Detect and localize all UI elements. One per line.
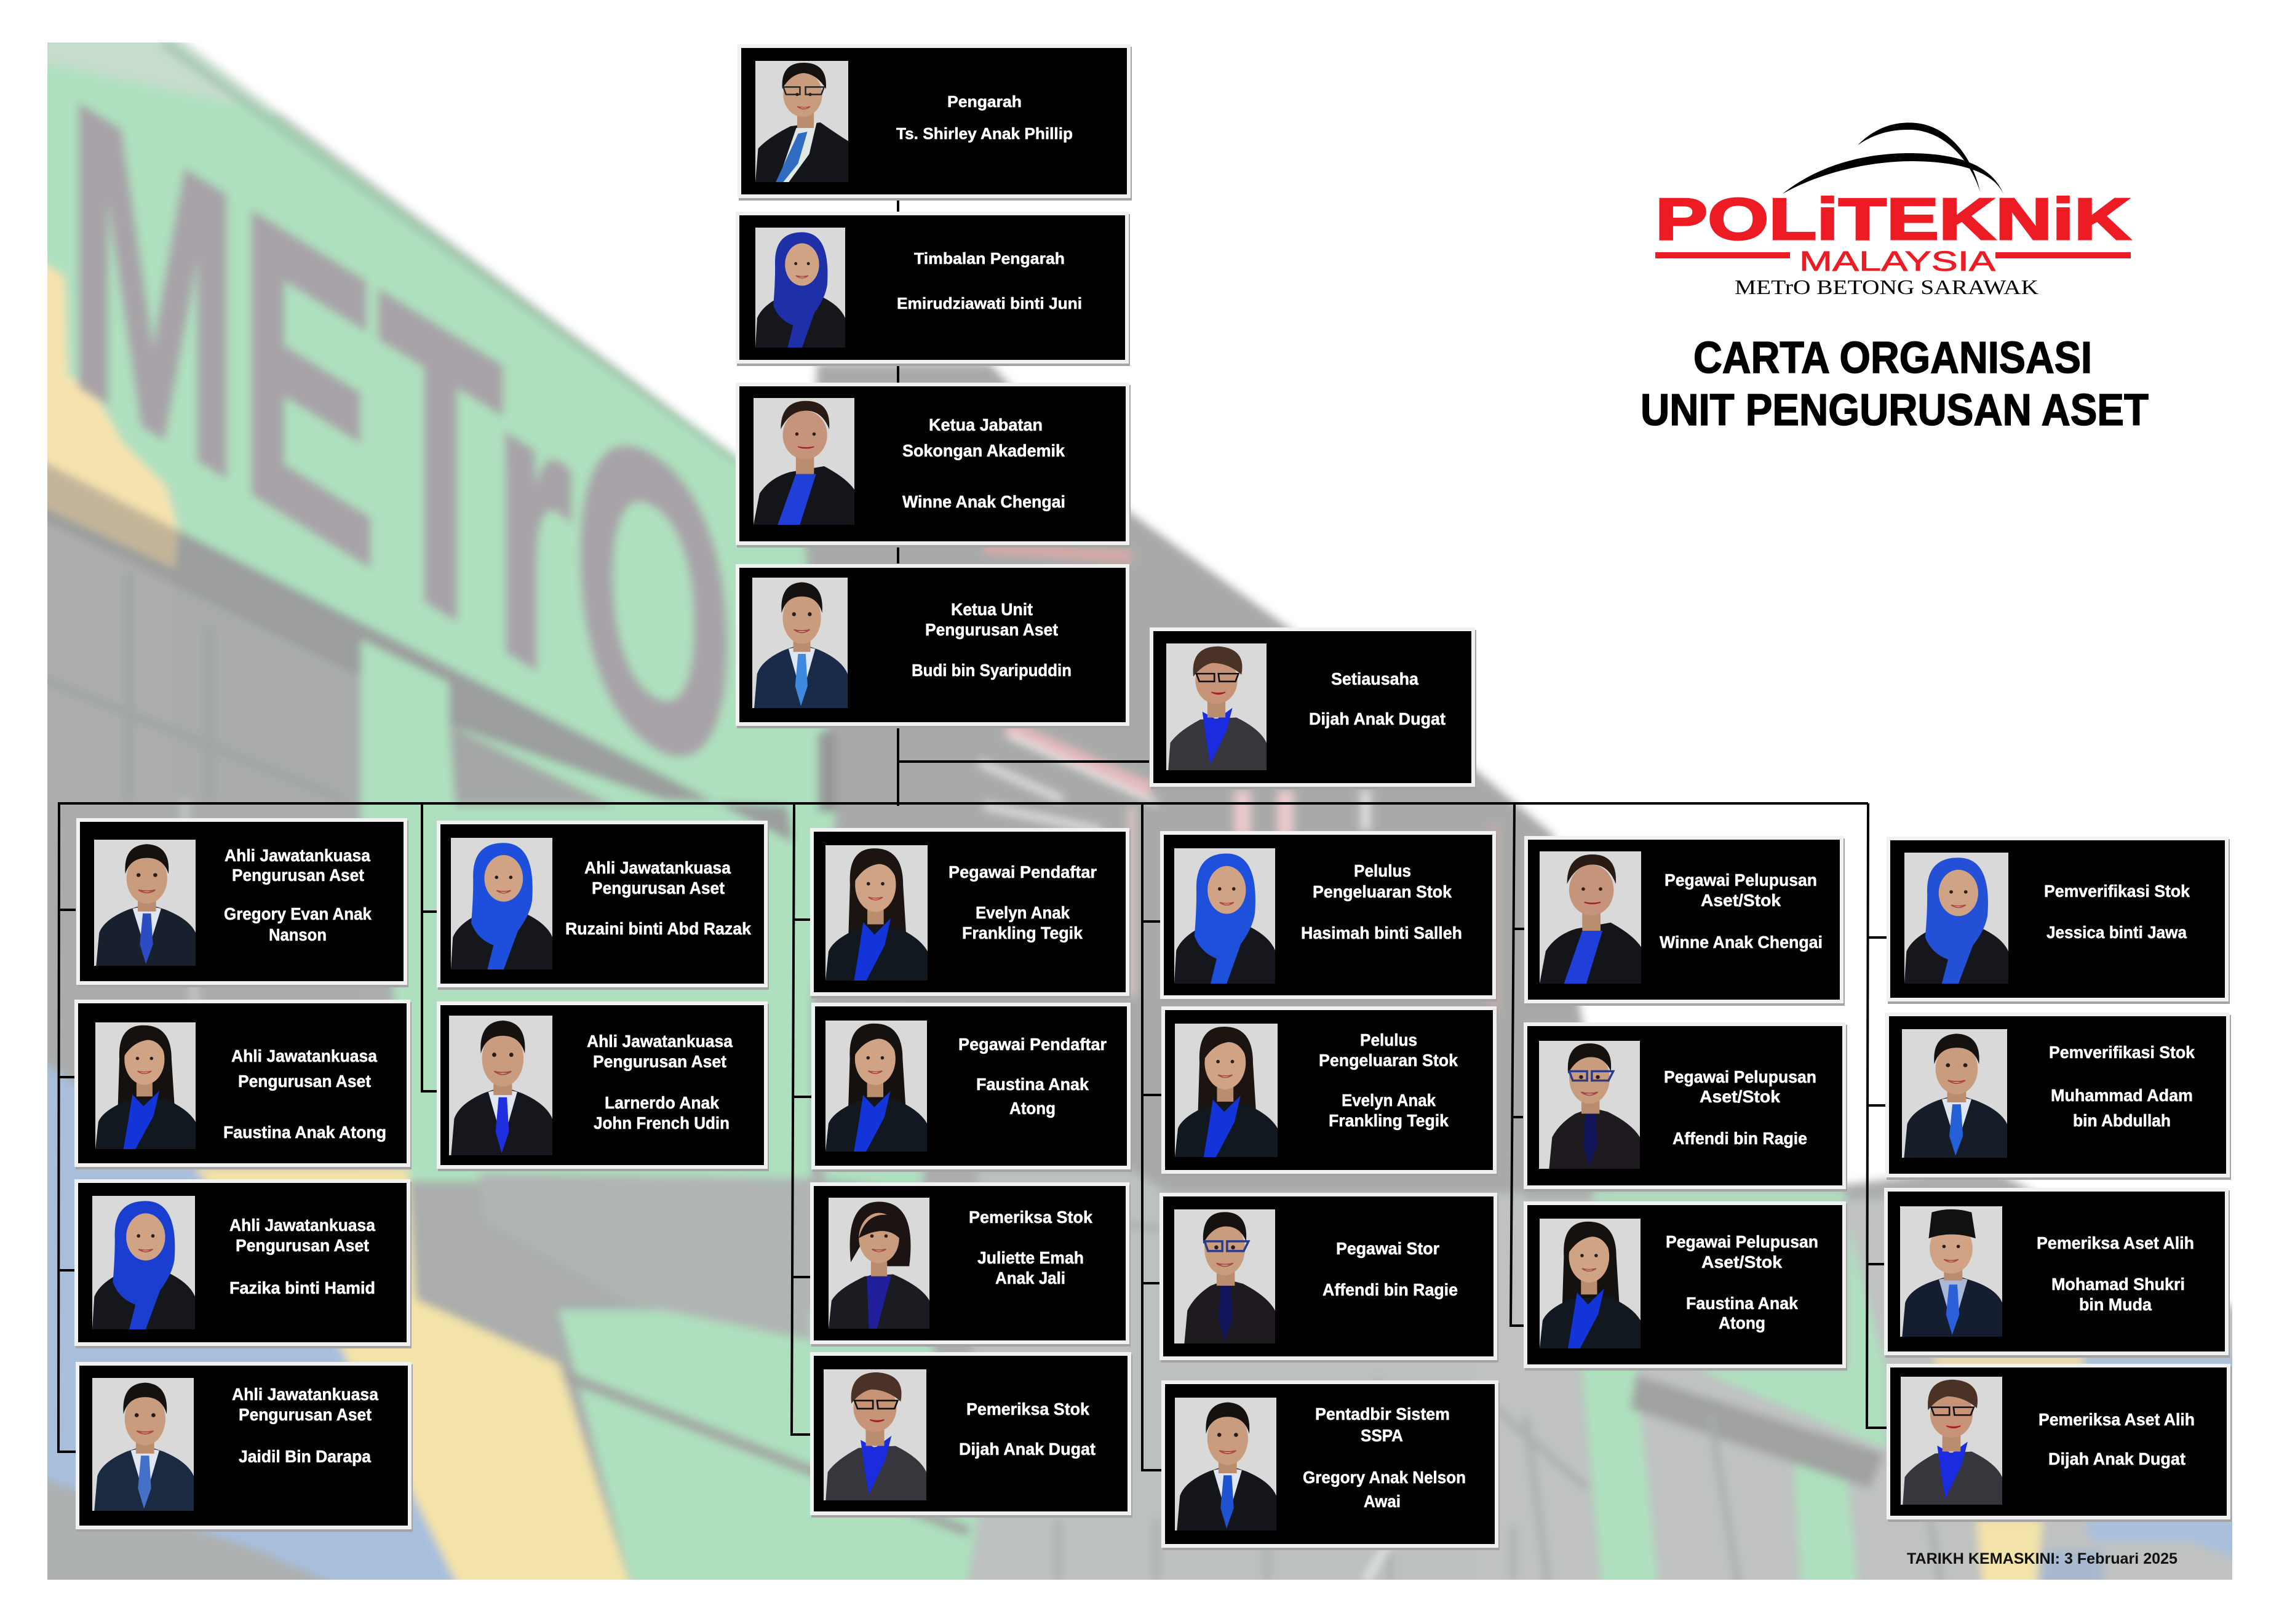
- text: [1301, 861, 1462, 942]
- card: Juliette: [811, 1184, 1131, 1347]
- text: Ahli Jawatankuasa: [231, 1046, 377, 1065]
- card: Faustina (Pegawai Pendaftar): [813, 1005, 1132, 1172]
- text: [232, 1385, 378, 1466]
- logo: Politeknik Malaysia: [1655, 122, 2131, 299]
- card: Timbalan Pengarah: [737, 213, 1130, 366]
- text: Mohamad Shukri: [2051, 1275, 2185, 1294]
- text: Pengeluaran Stok: [1319, 1051, 1458, 1070]
- text: [902, 415, 1065, 511]
- text: [969, 1208, 1092, 1288]
- text: Gregory Anak Nelson: [1303, 1468, 1466, 1487]
- portrait: [1174, 1209, 1275, 1343]
- text: Pelulus: [1354, 861, 1411, 880]
- card: Larnerdo: [438, 1003, 769, 1171]
- text: Pengarah: [947, 92, 1022, 111]
- card: Dijah (Pemeriksa Aset): [1888, 1366, 2232, 1522]
- text: Frankling Tegik: [1329, 1111, 1449, 1130]
- text: [224, 846, 372, 944]
- light grey building lower: [964, 1169, 1525, 1599]
- title: CARTA ORGANISASI: [1693, 333, 2092, 383]
- text: Jaidil Bin Darapa: [239, 1447, 371, 1466]
- text: Aset/Stok: [1701, 1252, 1782, 1272]
- text: [565, 858, 751, 938]
- portrait: [1175, 1024, 1278, 1157]
- card: Winne (Pelupusan): [1525, 838, 1845, 1006]
- card: Dijah (Pemeriksa Stok): [811, 1354, 1132, 1518]
- card: Affendi (Pelupusan): [1525, 1024, 1847, 1192]
- card: Adam: [1887, 1014, 2231, 1180]
- card: Gregory Nelson: [1163, 1382, 1500, 1550]
- campus name: METrO BETONG SARAWAK: [1735, 276, 2039, 299]
- text: [1309, 669, 1446, 728]
- text: Gregory Evan Anak: [224, 904, 372, 923]
- text: Pengurusan Aset: [238, 1072, 371, 1091]
- portrait: [825, 1021, 927, 1152]
- text: Pegawai Pelupusan: [1665, 870, 1817, 890]
- text: Sokongan Akademik: [902, 441, 1065, 460]
- text: Pegawai Pendaftar: [958, 1035, 1107, 1054]
- text: Pegawai Pendaftar: [949, 862, 1097, 882]
- text: Ahli Jawatankuasa: [587, 1032, 733, 1051]
- text: Pemeriksa Aset Alih: [2038, 1410, 2195, 1429]
- text: [949, 862, 1097, 942]
- text: [1303, 1404, 1466, 1511]
- portrait: [752, 578, 848, 708]
- text: Timbalan Pengarah: [914, 249, 1065, 268]
- portrait: [1175, 1398, 1276, 1530]
- text: Pemverifikasi Stok: [2044, 882, 2190, 901]
- yellow highlight upper left: [37, 258, 178, 530]
- text: [1664, 1067, 1816, 1148]
- text: Faustina Anak: [976, 1075, 1089, 1094]
- text: [229, 1216, 375, 1297]
- white sky: [163, 25, 2251, 1316]
- portrait: [92, 1378, 194, 1511]
- text: Pengeluaran Stok: [1313, 882, 1452, 901]
- card: Faustina (Pelupusan): [1525, 1203, 1847, 1371]
- text: bin Abdullah: [2073, 1111, 2171, 1130]
- text: Pelulus: [1360, 1030, 1417, 1049]
- portrait: [755, 61, 848, 182]
- text: [1319, 1030, 1458, 1130]
- card: Jaidil: [77, 1364, 413, 1532]
- wordmark: POLiTEKNiK: [1655, 186, 2131, 252]
- update date footer: TARIKH KEMASKINI: 3 Februari 2025: [1907, 1550, 2178, 1567]
- dark band under sign: [37, 458, 793, 843]
- card: Pengarah: [739, 46, 1132, 201]
- text: Dijah Anak Dugat: [1309, 709, 1446, 728]
- text: Pengurusan Aset: [232, 866, 364, 885]
- text: Dijah Anak Dugat: [959, 1439, 1096, 1459]
- portrait: [1540, 1219, 1641, 1348]
- text: Pentadbir Sistem: [1315, 1404, 1450, 1423]
- text: Ahli Jawatankuasa: [584, 858, 731, 877]
- card: Faustina: [76, 1001, 412, 1169]
- portrait: [1900, 1206, 2002, 1337]
- text: Budi bin Syaripuddin: [912, 661, 1072, 680]
- text: Awai: [1364, 1492, 1401, 1511]
- portrait: [94, 840, 196, 966]
- portrait: [1174, 848, 1275, 984]
- text: Pengurusan Aset: [592, 878, 725, 898]
- text: Pengurusan Aset: [593, 1052, 726, 1071]
- text: Hasimah binti Salleh: [1301, 923, 1462, 942]
- text: Ahli Jawatankuasa: [225, 846, 370, 865]
- text: John French Udin: [594, 1113, 730, 1132]
- text: [1322, 1239, 1458, 1299]
- text: [958, 1035, 1107, 1118]
- portrait: [1540, 851, 1641, 984]
- text: [912, 600, 1072, 680]
- blue: [37, 1058, 464, 1599]
- portrait: [449, 1016, 552, 1155]
- portrait: [1166, 643, 1267, 770]
- text: Dijah Anak Dugat: [2048, 1449, 2186, 1468]
- portrait: [1539, 1041, 1640, 1169]
- text: Anak Jali: [995, 1268, 1065, 1288]
- text: Jessica binti Jawa: [2046, 923, 2187, 942]
- text: Pegawai Pelupusan: [1666, 1232, 1818, 1251]
- green sign: [37, 31, 837, 1175]
- yellow band: [183, 1168, 635, 1599]
- text: Pengurusan Aset: [925, 620, 1058, 639]
- lines over light grey: [824, 1181, 1513, 1581]
- text: Aset/Stok: [1701, 891, 1781, 910]
- text: Faustina Anak: [1686, 1294, 1798, 1313]
- text: Pegawai Pelupusan: [1664, 1067, 1816, 1086]
- text: [587, 1032, 733, 1132]
- card: Ketua Unit: [737, 566, 1131, 728]
- text: Pengurusan Aset: [239, 1405, 372, 1424]
- text: Larnerdo Anak: [605, 1093, 719, 1112]
- text: Pegawai Stor: [1336, 1239, 1439, 1258]
- icon: swoosh: [1783, 122, 2003, 194]
- grey window block middle: [480, 1173, 812, 1341]
- text: Muhammad Adam: [2051, 1086, 2193, 1105]
- text: Setiausaha: [1331, 669, 1418, 688]
- text: [2037, 1233, 2194, 1314]
- portrait: [92, 1196, 195, 1329]
- text: Evelyn Anak: [976, 903, 1070, 922]
- card: Ketua Jabatan: [737, 384, 1131, 547]
- card: Affendi (Pegawai Stor): [1161, 1195, 1498, 1363]
- text: Pengurusan Aset: [236, 1236, 369, 1255]
- text: [1660, 870, 1823, 952]
- text: Emirudziawati binti Juni: [897, 294, 1082, 312]
- text: Fazika binti Hamid: [229, 1278, 375, 1297]
- text: Atong: [1009, 1099, 1056, 1118]
- text: [2038, 1410, 2195, 1468]
- portrait: [451, 838, 552, 969]
- text: [2049, 1043, 2195, 1130]
- card: Ruzaini: [438, 822, 769, 990]
- card: Fazika: [76, 1181, 412, 1348]
- text: Nanson: [269, 925, 327, 944]
- text: [223, 1046, 386, 1142]
- text: Affendi bin Ragie: [1672, 1129, 1807, 1148]
- card: Evelyn (Pelulus): [1163, 1008, 1498, 1176]
- text: [1666, 1232, 1818, 1332]
- portrait: [755, 228, 845, 348]
- red rules: [1655, 252, 2131, 258]
- portrait: [1904, 853, 2008, 984]
- text: Ts. Shirley Anak Phillip: [896, 124, 1073, 143]
- text: Ahli Jawatankuasa: [229, 1216, 375, 1235]
- text: Faustina Anak Atong: [223, 1123, 386, 1142]
- card: Gregory Evan: [78, 820, 408, 987]
- portrait: [824, 1369, 926, 1500]
- card: Jessica: [1888, 838, 2230, 1004]
- green bands right: [1593, 1190, 1845, 1203]
- title: [1641, 333, 2149, 435]
- text: Juliette Emah: [977, 1248, 1084, 1267]
- window block left: [37, 572, 344, 800]
- text: Pemverifikasi Stok: [2049, 1043, 2195, 1062]
- connector lines: [58, 201, 1889, 1470]
- text: Affendi bin Ragie: [1322, 1280, 1458, 1299]
- card: Hasimah: [1161, 833, 1497, 1001]
- portrait: [825, 845, 928, 981]
- text: Pemeriksa Aset Alih: [2037, 1233, 2194, 1252]
- text: Pemeriksa Stok: [966, 1399, 1089, 1419]
- portrait: [829, 1198, 929, 1329]
- text: [897, 249, 1082, 312]
- text: Ketua Jabatan: [929, 415, 1043, 434]
- sign lettering METrO: METrO: [66, 10, 734, 877]
- portrait: [1902, 1029, 2007, 1158]
- text: Aset/Stok: [1700, 1087, 1780, 1106]
- text: bin Muda: [2079, 1295, 2152, 1314]
- card: Shukri: [1885, 1190, 2230, 1358]
- text: Frankling Tegik: [962, 923, 1083, 942]
- card: Evelyn (Pegawai Pendaftar): [811, 830, 1131, 998]
- text: Atong: [1719, 1313, 1765, 1332]
- text: Ruzaini binti Abd Razak: [565, 919, 751, 938]
- text: Ketua Unit: [951, 600, 1033, 619]
- logo grey on roof: [805, 363, 1612, 1193]
- title: UNIT PENGURUSAN ASET: [1641, 386, 2149, 435]
- text: Ahli Jawatankuasa: [232, 1385, 378, 1404]
- text: [2044, 882, 2190, 942]
- text: Evelyn Anak: [1342, 1091, 1436, 1110]
- portrait: [754, 398, 854, 525]
- card: Setiausaha: [1151, 629, 1476, 789]
- text: [959, 1399, 1096, 1459]
- portrait: [95, 1022, 196, 1149]
- text: Winne Anak Chengai: [902, 492, 1065, 511]
- portrait: [1901, 1377, 2002, 1505]
- text: [896, 92, 1073, 143]
- text: SSPA: [1361, 1426, 1403, 1445]
- text: Pemeriksa Stok: [969, 1208, 1092, 1227]
- text: Winne Anak Chengai: [1660, 933, 1823, 952]
- Malaysia: MALAYSIA: [1799, 245, 1995, 277]
